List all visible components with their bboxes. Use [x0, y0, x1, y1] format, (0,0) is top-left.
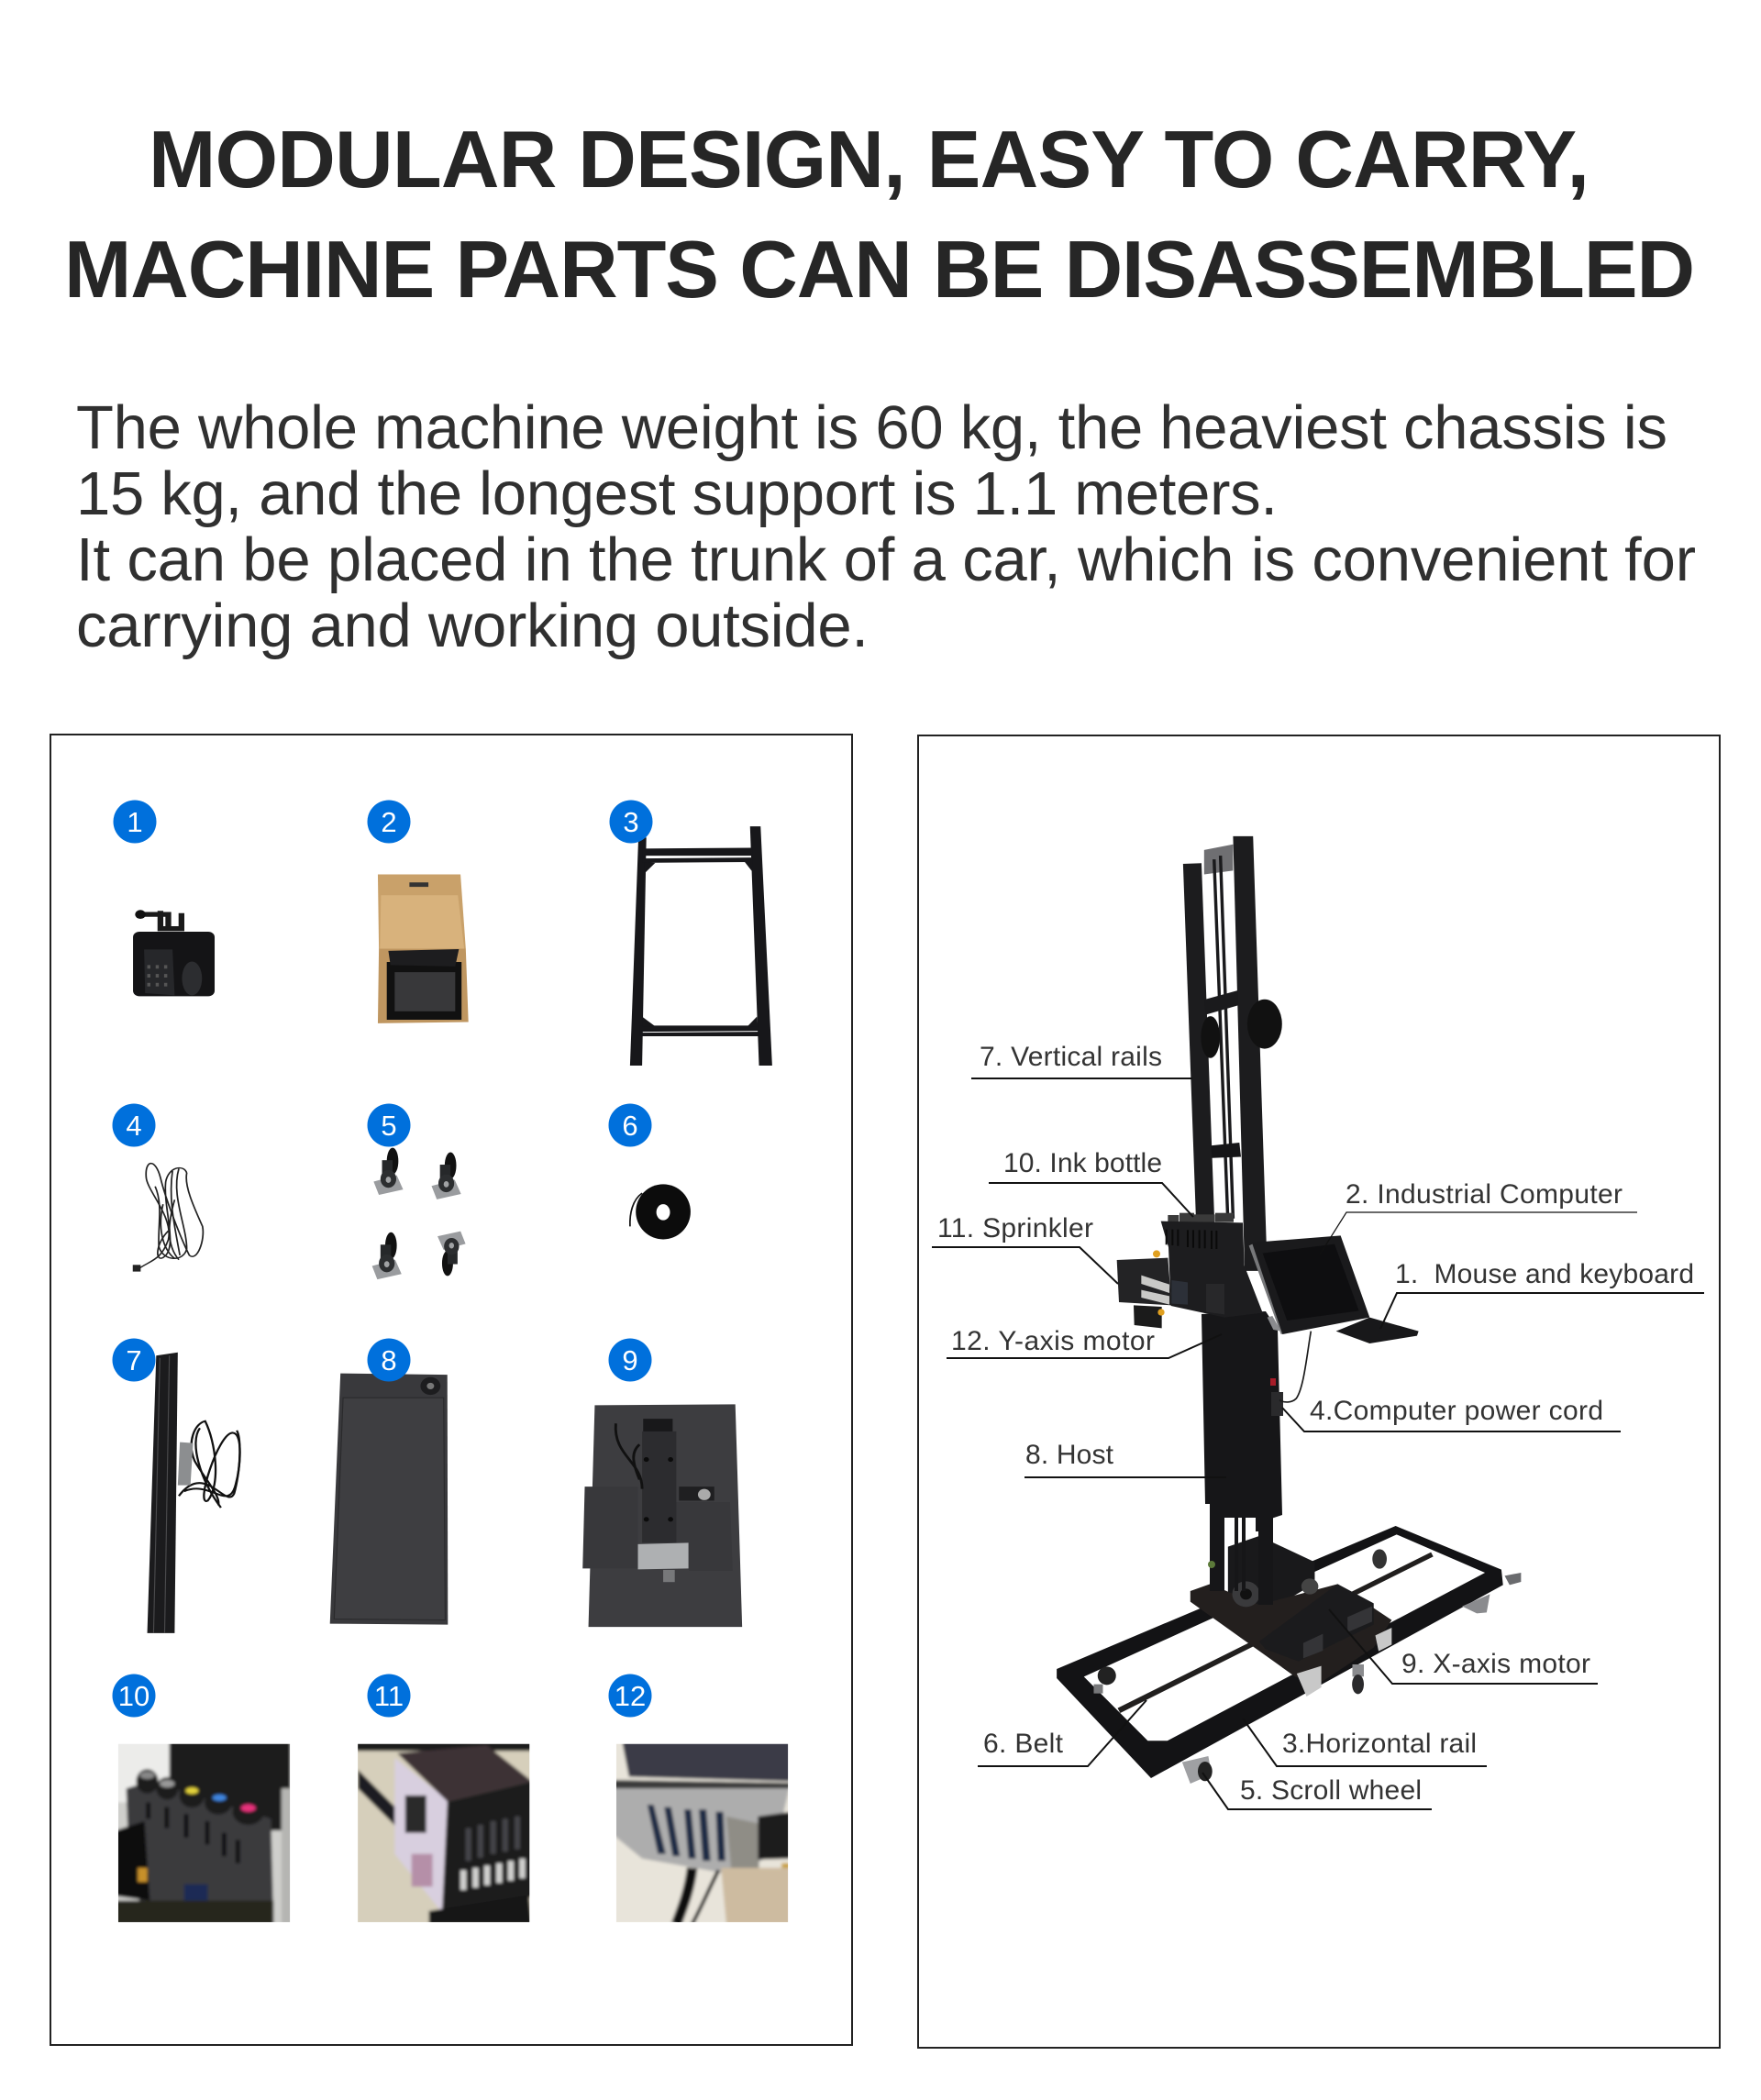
callout: 9. X-axis motor	[1329, 1609, 1598, 1684]
panel: disassembled parts	[50, 735, 852, 2045]
callout: 6. Belt	[978, 1700, 1146, 1766]
number badges: 12	[615, 1680, 646, 1712]
number badges: 10	[118, 1680, 150, 1712]
part photos, third row	[148, 1353, 742, 1633]
computer power cord	[1279, 1332, 1311, 1402]
callout: 8. Host: 8. Host	[1025, 1440, 1114, 1470]
number badges: 7	[126, 1344, 142, 1376]
photo: ink bottle	[116, 1741, 293, 1924]
part photos, upper rows	[133, 826, 772, 1279]
icon: host panel	[330, 1374, 448, 1625]
callout: 4.Computer power cord: 4.Computer power cord	[1310, 1396, 1603, 1426]
ink bottle box	[1161, 1213, 1263, 1318]
callout: 1. Mouse and keyboard	[1380, 1259, 1704, 1329]
machine head detail	[1117, 1213, 1419, 1402]
text block: weight and portability description	[76, 393, 1696, 660]
text block: weight and portability description: 15 kg, and the longest support is 1.1 meters.	[76, 459, 1278, 528]
callout: 12. Y-axis motor: 12. Y-axis motor	[951, 1326, 1155, 1356]
callout: 7. Vertical rails: 7. Vertical rails	[980, 1042, 1162, 1072]
icon: horizontal rail frame	[630, 826, 772, 1066]
vertical rails	[1183, 836, 1282, 1271]
upper column box and chassis	[1191, 1536, 1391, 1685]
number badges: 8	[381, 1344, 397, 1376]
callout: 11. Sprinkler	[932, 1213, 1118, 1284]
number badges: 6	[622, 1110, 638, 1142]
callout: 3.Horizontal rail: 3.Horizontal rail	[1282, 1729, 1477, 1759]
text block: weight and portability description: The whole machine weight is 60 kg, the heaviest chassis is	[76, 393, 1667, 462]
X-axis motor box	[1259, 1584, 1391, 1697]
number badges: 3	[623, 806, 639, 838]
keyboard tray	[1336, 1318, 1419, 1343]
title: MACHINE PARTS CAN BE DISASSEMBLED	[64, 224, 1695, 315]
number badges: 4	[126, 1110, 142, 1142]
title	[64, 114, 1695, 315]
text block: weight and portability description: carrying and working outside.	[76, 591, 869, 660]
callout: 10. Ink bottle	[989, 1148, 1193, 1217]
icon: vertical rails and belt	[148, 1353, 240, 1633]
number badges: 11	[374, 1680, 404, 1712]
scroll wheels	[1093, 1549, 1521, 1784]
panel: assembled machine with callouts	[918, 735, 1720, 2048]
belt	[1118, 1553, 1434, 1713]
callout: 11. Sprinkler: 11. Sprinkler	[937, 1213, 1093, 1243]
callout: 3.Horizontal rail	[1243, 1719, 1487, 1766]
number badges: 1	[127, 806, 143, 838]
callout: 2. Industrial Computer: 2. Industrial Computer	[1346, 1179, 1623, 1210]
sprinkler	[1117, 1250, 1171, 1328]
icon: computer in box	[378, 875, 469, 1023]
icon: chassis with motor	[582, 1404, 742, 1627]
host column	[1202, 1311, 1283, 1605]
base frame	[1057, 1526, 1503, 1778]
callout: 2. Industrial Computer	[1320, 1179, 1637, 1254]
callout: 5. Scroll wheel	[1202, 1773, 1432, 1809]
callout: 12. Y-axis motor	[947, 1326, 1222, 1358]
icon: mouse and keyboard tray	[133, 910, 215, 996]
industrial computer	[1249, 1235, 1369, 1334]
photo: sprinkler	[355, 1741, 532, 1924]
number badges: 9	[622, 1344, 638, 1376]
callout: 5. Scroll wheel: 5. Scroll wheel	[1240, 1775, 1422, 1806]
callout: 9. X-axis motor: 9. X-axis motor	[1401, 1649, 1590, 1679]
photo: Y-axis motor	[614, 1741, 791, 1924]
number badges	[112, 800, 653, 1717]
machine base (lower section)	[1057, 1526, 1521, 1784]
number badges: 2	[381, 806, 397, 838]
icon: power cord	[134, 1164, 203, 1271]
callout: 10. Ink bottle: 10. Ink bottle	[1003, 1148, 1162, 1178]
callout: 1. Mouse and keyboard: 1. Mouse and keyboard	[1395, 1259, 1694, 1289]
icon: four casters	[372, 1148, 466, 1279]
icon: belt roll	[630, 1184, 691, 1239]
text block: weight and portability description: It can be placed in the trunk of a car, which is convenient for	[76, 525, 1696, 594]
callout: 6. Belt: 6. Belt	[983, 1729, 1064, 1759]
number badges: 5	[381, 1110, 397, 1142]
title: MODULAR DESIGN, EASY TO CARRY,	[149, 114, 1589, 204]
